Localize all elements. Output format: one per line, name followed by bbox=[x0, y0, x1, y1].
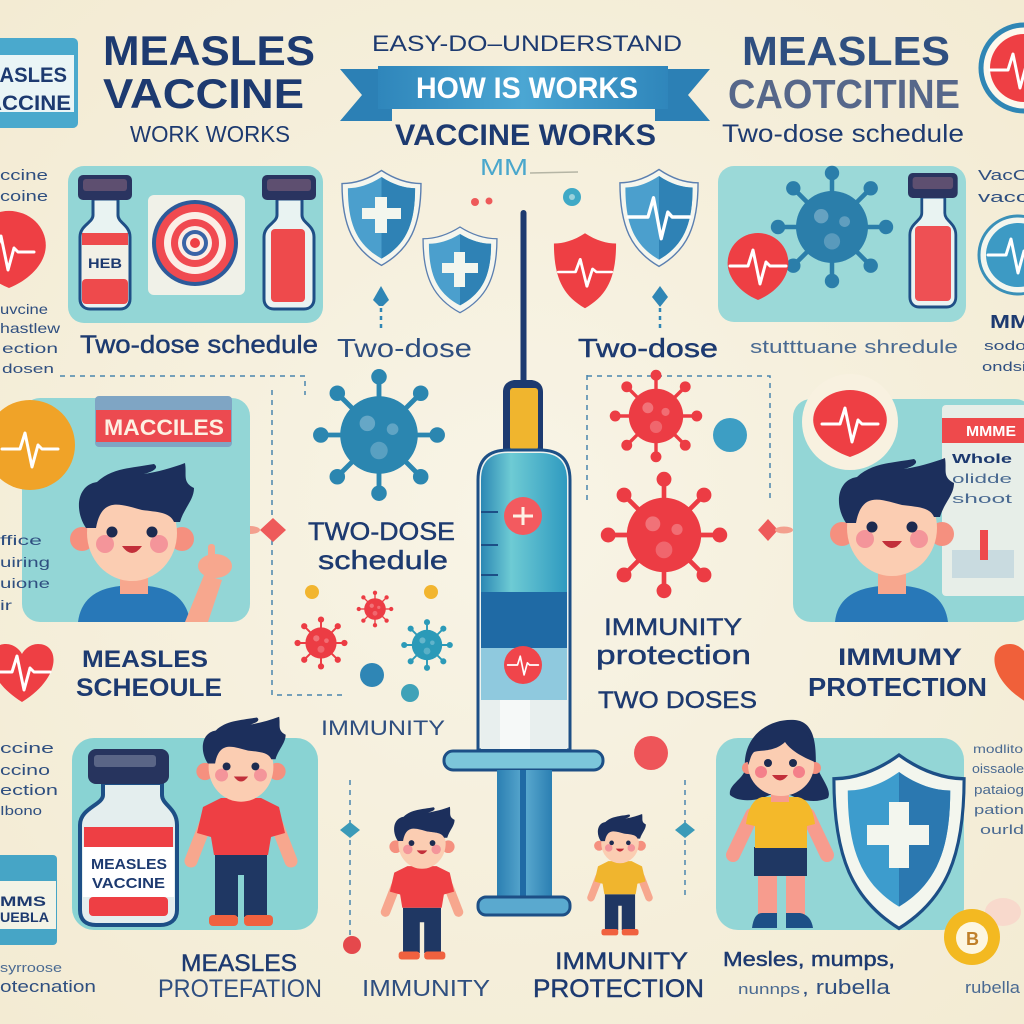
title right: MEASLES bbox=[742, 28, 950, 74]
icon: heartbeat badge top right bbox=[981, 25, 1024, 111]
right column text bottom: pataiog bbox=[974, 782, 1024, 797]
title left bbox=[103, 27, 315, 147]
text: measles mumps rubella: nunnps bbox=[738, 981, 800, 998]
panel: child with card bbox=[793, 399, 1024, 622]
text: two-dose schedule centre-left: TWO-DOSE bbox=[308, 518, 455, 546]
text: measles schedule: MEASLES bbox=[82, 646, 208, 673]
header left: vaccine label card bbox=[0, 38, 78, 128]
text: immunity protection two doses: IMMUNITY bbox=[604, 614, 742, 641]
large vaccine vial: MEASLES bbox=[91, 856, 167, 873]
title left: VACCINE bbox=[103, 70, 304, 117]
needle bbox=[520, 210, 526, 385]
icon: heart left edge bbox=[0, 644, 54, 702]
title left: WORK WORKS bbox=[130, 121, 290, 147]
small viruses cluster bbox=[294, 585, 453, 702]
text: measles protection bbox=[158, 950, 322, 1003]
title right: CAOTCITINE bbox=[728, 71, 960, 117]
left column text lower: ection bbox=[2, 340, 58, 356]
left column text bottom: ccino bbox=[0, 762, 50, 779]
right column text bottom: pation bbox=[974, 802, 1024, 817]
info card bbox=[942, 405, 1024, 596]
label two-dose left: Two-dose bbox=[337, 333, 472, 363]
shield: blue pulse bbox=[620, 170, 698, 266]
right column text lower: ondsi bbox=[982, 359, 1024, 374]
title left: MEASLES bbox=[103, 27, 315, 74]
right column text upper: vacc bbox=[978, 189, 1024, 206]
shirt bbox=[835, 570, 948, 622]
text: rubella right: rubella bbox=[965, 978, 1021, 997]
right column text bottom bbox=[972, 742, 1024, 837]
left column text middle: ir bbox=[0, 597, 13, 613]
info card: shoot bbox=[952, 491, 1013, 506]
left column text middle: uione bbox=[0, 575, 50, 591]
dashed connectors bbox=[60, 375, 770, 940]
text: immumy protection bbox=[808, 644, 987, 702]
plunger bbox=[478, 770, 570, 915]
centre subtitle: EASY-DO–UNDERSTAND bbox=[372, 31, 682, 56]
icon: gold coin bbox=[944, 898, 1021, 965]
right column text bottom: oissaole bbox=[972, 761, 1024, 776]
small label MM bbox=[480, 154, 578, 180]
left column text middle: uiring bbox=[0, 554, 50, 570]
text: immunity protection two doses: protection bbox=[596, 640, 751, 670]
centre heading: VACCINE WORKS bbox=[395, 119, 656, 152]
label two-dose right: Two-dose bbox=[578, 333, 718, 363]
virus: red large bbox=[601, 472, 727, 598]
connector diamonds bbox=[240, 518, 793, 954]
flange bbox=[444, 751, 603, 770]
right column text lower: MM bbox=[990, 312, 1024, 332]
virus bbox=[771, 166, 893, 288]
heart badge bbox=[728, 233, 788, 300]
centre ribbon banner: HOW IS WORKS bbox=[416, 72, 638, 105]
text: immunity protection bottom bbox=[533, 948, 704, 1003]
text: immumy protection: IMMUMY bbox=[838, 644, 962, 671]
text: immunity protection two doses bbox=[596, 614, 757, 714]
text: immunity protection bottom: PROTECTION bbox=[533, 975, 704, 1003]
text: measles mumps rubella: , rubella bbox=[802, 977, 891, 999]
text: immunity protection bottom: IMMUNITY bbox=[555, 948, 688, 975]
title right: Two-dose schedule bbox=[722, 120, 964, 148]
girl bbox=[730, 720, 829, 928]
virus: large blue bbox=[313, 369, 445, 501]
child head bbox=[830, 458, 954, 576]
large vaccine vial: VACCINE bbox=[92, 875, 165, 892]
info card: MMME bbox=[966, 423, 1016, 440]
right column text lower bbox=[982, 312, 1024, 374]
syringe bbox=[444, 210, 603, 915]
right column text upper bbox=[978, 167, 1024, 206]
text: measles mumps rubella bbox=[723, 949, 895, 999]
left column text upper: ccine bbox=[0, 167, 48, 184]
right column text lower: sodo bbox=[984, 338, 1024, 353]
icon: blue pulse badge right bbox=[979, 216, 1024, 294]
left column text lower: uvcine bbox=[0, 301, 48, 317]
centre ribbon banner bbox=[340, 66, 710, 121]
label card bbox=[95, 396, 232, 447]
text: immunity centre: IMMUNITY bbox=[321, 717, 445, 740]
text: measles mumps rubella: Mesles, mumps, bbox=[723, 949, 895, 971]
right column text bottom: modlito bbox=[973, 742, 1023, 756]
target on paper bbox=[148, 195, 245, 295]
vial left bbox=[78, 175, 132, 309]
left column text middle bbox=[0, 532, 50, 613]
arrow up left bbox=[373, 286, 389, 330]
text: two-dose schedule centre-left: schedule bbox=[318, 545, 448, 575]
panel: child with measles label bbox=[22, 396, 250, 622]
vial left: HEB bbox=[88, 255, 122, 271]
caption: schedule right: stutttuane shredule bbox=[750, 337, 958, 357]
vial right bbox=[262, 175, 316, 309]
left column text bottom bbox=[0, 740, 58, 818]
text: measles protection: MEASLES bbox=[181, 950, 297, 977]
left column text bottom: Ibono bbox=[0, 803, 42, 818]
right column text bottom: ourld bbox=[980, 822, 1024, 837]
label card MMR: MMS bbox=[0, 893, 46, 909]
icon: gold coin: B bbox=[966, 929, 979, 949]
arrow up right bbox=[652, 286, 668, 330]
barrel bbox=[478, 450, 570, 750]
icon: orange heartbeat badge bbox=[0, 400, 75, 490]
small label MM: MM bbox=[480, 154, 528, 180]
shirt and hand bbox=[78, 544, 232, 622]
text: measles schedule: SCHEOULE bbox=[76, 674, 222, 702]
child red shirt bbox=[191, 717, 291, 926]
text: measles schedule bbox=[76, 646, 222, 702]
info card: Whole bbox=[952, 451, 1012, 466]
left column text lower bbox=[0, 301, 61, 376]
left column text upper: coine bbox=[0, 188, 48, 205]
big shield bbox=[834, 755, 964, 928]
panel: vials and target bbox=[68, 166, 323, 323]
icon: red heart left bbox=[0, 211, 46, 288]
shield: blue plus large bbox=[342, 170, 421, 265]
text: bottom left notes: syrroose bbox=[0, 960, 62, 975]
child head bbox=[70, 463, 194, 581]
hub bbox=[503, 380, 543, 450]
right column text upper: VacC bbox=[978, 167, 1024, 184]
left column text lower: hastlew bbox=[0, 320, 61, 336]
label card MMR bbox=[0, 855, 57, 945]
child centre red bbox=[386, 807, 458, 960]
left column text upper bbox=[0, 167, 48, 205]
label card MMR: UEBLA bbox=[0, 909, 49, 925]
panel: girl with shield bbox=[716, 720, 964, 930]
heart mark upper bbox=[504, 497, 542, 535]
text: measles protection: PROTEFATION bbox=[158, 975, 322, 1003]
shield: red pulse bbox=[554, 233, 616, 308]
left column text bottom: ection bbox=[0, 782, 58, 799]
left column text bottom: ccine bbox=[0, 740, 54, 757]
panel: virus heart and vial bbox=[718, 166, 966, 322]
info card: olidde bbox=[952, 471, 1012, 486]
text: bottom left notes: otecnation bbox=[0, 977, 96, 996]
label card: MACCILES bbox=[104, 415, 224, 440]
large vaccine vial bbox=[80, 749, 177, 925]
text: immumy protection: PROTECTION bbox=[808, 672, 987, 702]
title right bbox=[722, 28, 964, 148]
vial bbox=[908, 173, 958, 307]
icon: orange heart right edge bbox=[994, 644, 1024, 702]
panel: vaccine vial with child bbox=[72, 717, 318, 930]
text: two-dose schedule centre-left bbox=[308, 518, 455, 575]
caption: two-dose schedule left: Two-dose schedule bbox=[80, 331, 318, 359]
dot teal bbox=[713, 418, 747, 452]
virus: red small upper bbox=[610, 370, 702, 462]
text: immunity protection two doses: TWO DOSES bbox=[598, 687, 757, 714]
heart mark lower bbox=[504, 646, 542, 684]
icon: heart badge bbox=[802, 374, 898, 470]
child centre yellow bbox=[591, 814, 649, 935]
shield: blue plus small bbox=[423, 227, 497, 313]
text: immunity bottom: IMMUNITY bbox=[362, 975, 490, 1001]
text: bottom left notes bbox=[0, 960, 96, 996]
left column text lower: dosen bbox=[2, 361, 54, 376]
small dots near needle bbox=[471, 188, 581, 206]
left column text middle: ffice bbox=[0, 532, 42, 548]
